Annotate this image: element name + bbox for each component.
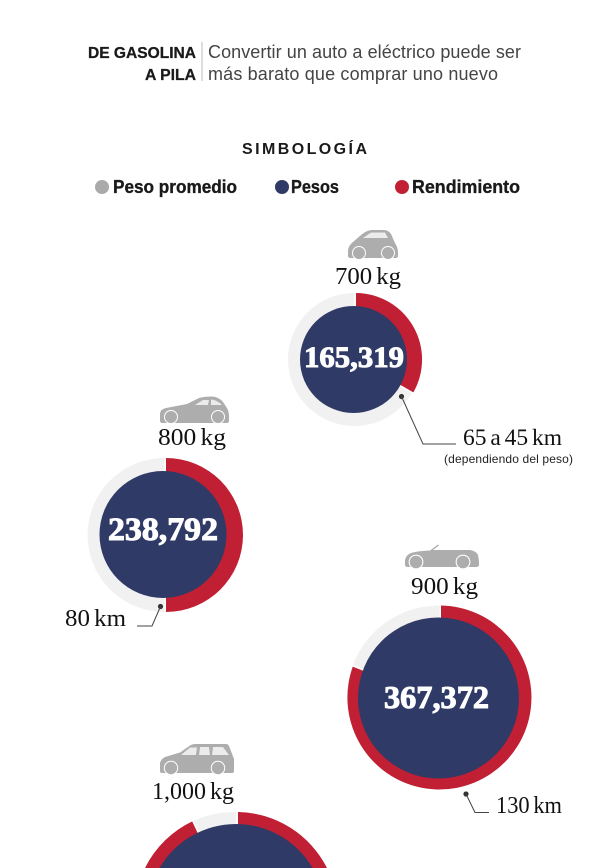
header subtitle: más barato que comprar uno nuevo [208, 64, 498, 84]
header subtitle [208, 42, 521, 84]
icon: hatchback [160, 396, 229, 424]
callout: range: 130 km [496, 793, 562, 819]
legend item: pesos: Pesos [291, 177, 339, 197]
legend item: peso promedio: Peso promedio [113, 177, 237, 197]
icon: minivan [160, 744, 234, 775]
callout: range: 65 a 45 km [463, 425, 562, 450]
icon: small car [348, 230, 398, 260]
icon: convertible [405, 544, 479, 569]
header title: A PILA [145, 67, 196, 84]
callout: range [65, 604, 163, 632]
legend heading: SIMBOLOGÍA [242, 139, 367, 158]
weight label: 900 kg [411, 574, 478, 600]
ring chart [347, 606, 531, 790]
panel: 1,000 kg car [145, 744, 327, 868]
header title: DE GASOLINA [88, 45, 196, 62]
ring chart: 367,372 [384, 679, 489, 715]
weight label: 700 kg [335, 264, 401, 290]
header subtitle: Convertir un auto a eléctrico puede ser [208, 42, 521, 62]
panel: 700 kg car [288, 230, 573, 466]
callout: range: 80 km [65, 606, 126, 632]
legend item: pesos [275, 177, 339, 197]
callout: range [399, 394, 573, 466]
callout: range: (dependiendo del peso) [444, 452, 573, 466]
ring chart: 238,792 [108, 512, 218, 548]
ring chart: 165,319 [304, 341, 404, 374]
ring chart [145, 812, 327, 868]
weight label: 800 kg [158, 425, 226, 451]
legend [95, 177, 520, 197]
panel: 900 kg car [347, 544, 562, 819]
header title [88, 45, 196, 84]
ring chart [88, 458, 243, 612]
legend item: rendimiento: Rendimiento [412, 177, 520, 197]
ring chart [288, 293, 422, 426]
weight label: 1,000 kg [152, 779, 234, 805]
panel: 800 kg car [65, 396, 243, 632]
callout: range [463, 791, 562, 819]
